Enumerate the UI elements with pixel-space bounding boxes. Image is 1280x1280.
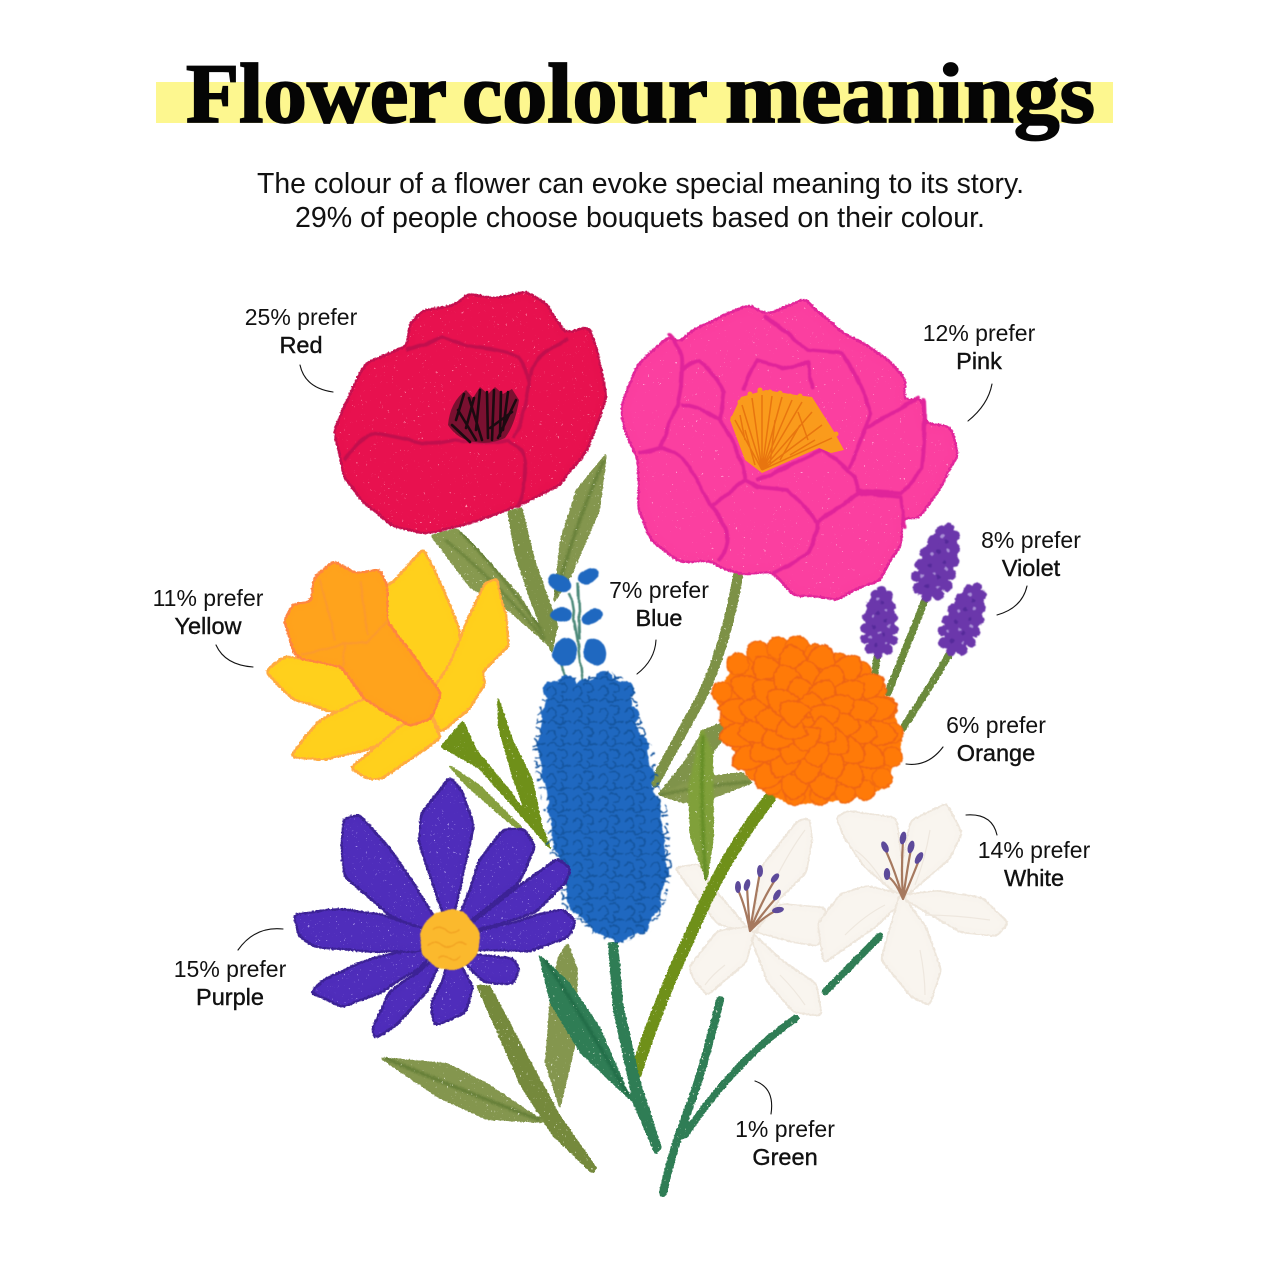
title text: colour: [462, 47, 708, 141]
daffodil: yellow: [263, 547, 510, 780]
label: red: Red: [279, 332, 323, 358]
label: white: 14% prefer: [978, 837, 1091, 863]
label: orange: [906, 712, 1046, 766]
stems: lavender: [874, 600, 950, 728]
stems and leaves: red flower: [430, 452, 607, 655]
orange trumpet: [283, 560, 443, 728]
label: blue: Blue: [635, 605, 683, 631]
purple petals: [292, 775, 578, 1040]
subtitle: 29% of people choose bouquets based on their colour.: [295, 202, 985, 234]
label: violet: Violet: [1002, 555, 1061, 581]
peony stamens: [730, 390, 844, 473]
label: pink: Pink: [956, 348, 1002, 374]
label: yellow: 11% prefer: [153, 585, 264, 611]
title text: Flower: [186, 47, 447, 141]
label: green: Green: [752, 1144, 818, 1170]
stem and leaves: yellow flower: [440, 693, 553, 853]
lily left petals: [673, 817, 827, 1017]
subtitle: [257, 168, 1024, 234]
label: green: 1% prefer: [735, 1116, 835, 1142]
label: orange: Orange: [957, 740, 1035, 766]
lily stamens: [735, 831, 925, 931]
label: yellow: Yellow: [174, 613, 243, 639]
title text: [186, 47, 1095, 141]
stem: pink flower: [655, 576, 738, 782]
aster: purple: [292, 775, 578, 1040]
label: pink: 12% prefer: [923, 320, 1036, 346]
label: orange: 6% prefer: [946, 712, 1046, 738]
label: white: [966, 815, 1091, 891]
delphinium stems and buds: blue: [545, 564, 609, 683]
label: white: White: [1004, 865, 1064, 891]
dark green stem and leaf: blue flower: [538, 942, 662, 1155]
peony: pink: [621, 297, 960, 600]
label: purple: [174, 929, 287, 1010]
lily right petals: [817, 802, 1010, 1007]
bouquet illustration: [263, 290, 1010, 1193]
label: purple: Purple: [196, 984, 264, 1010]
lavender: violet: [859, 516, 998, 664]
leaves: orange flower: [657, 720, 753, 883]
title: [156, 47, 1113, 141]
stem: orange flower: [636, 798, 770, 1073]
lily vein lines: [705, 830, 990, 1005]
poppy centre: [448, 387, 519, 443]
yellow petals: [263, 547, 510, 780]
aster centre: [412, 902, 488, 978]
label: violet: [981, 527, 1081, 615]
label: green: [735, 1081, 835, 1170]
marigold: orange: [700, 628, 916, 816]
label: yellow: [153, 585, 264, 667]
label: red: [245, 304, 358, 392]
subtitle: The colour of a flower can evoke special meaning to its story.: [257, 168, 1024, 200]
poppy: red: [333, 290, 607, 535]
title highlight band: [156, 82, 1113, 123]
label: purple: 15% prefer: [174, 956, 287, 982]
label: blue: 7% prefer: [609, 577, 709, 603]
purple flower stem and leaves: [378, 942, 597, 1174]
white flowers: [673, 802, 1010, 1017]
label: violet: 8% prefer: [981, 527, 1081, 553]
stems: white flowers (green): [663, 936, 880, 1193]
title text: meanings: [725, 47, 1095, 141]
label: pink: [923, 320, 1036, 421]
delphinium: blue: [532, 668, 672, 944]
label: blue: [609, 577, 709, 674]
label: red: 25% prefer: [245, 304, 358, 330]
